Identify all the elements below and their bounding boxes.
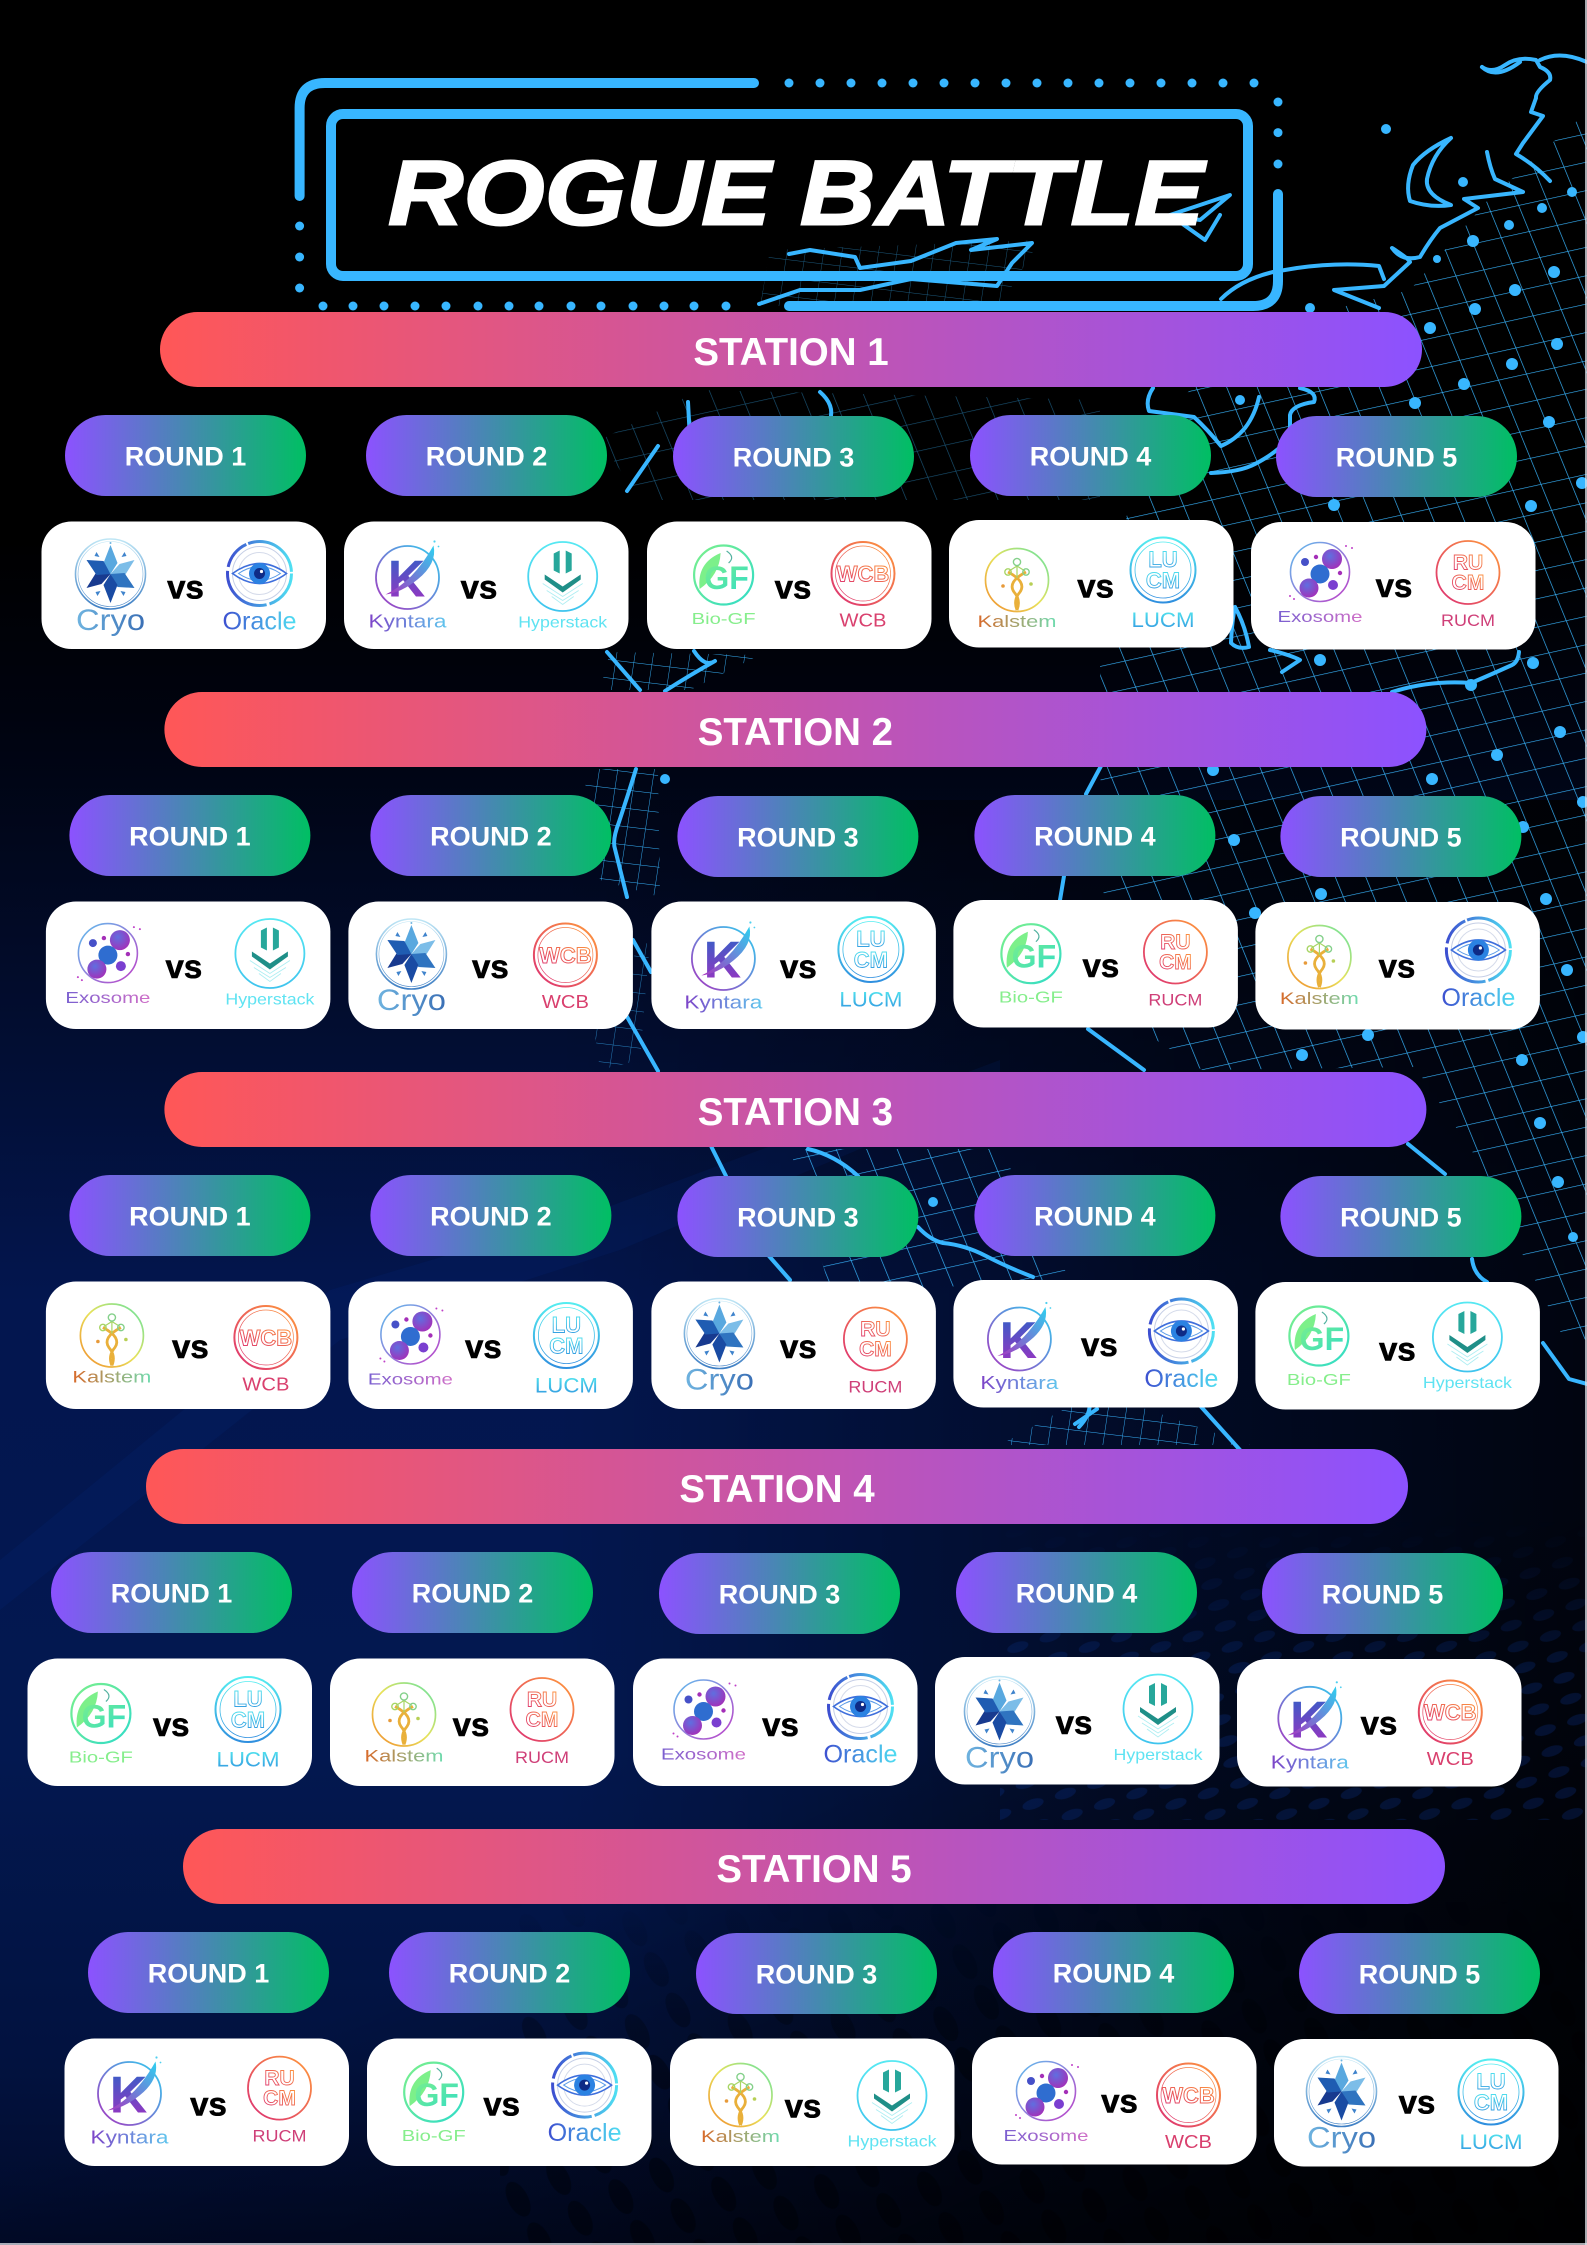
logo: Cryo: Cryo xyxy=(1307,2122,1376,2154)
match card: Bio-GF vs LUCM xyxy=(28,1658,312,1786)
round 3 pill xyxy=(696,1933,937,2014)
logo: WCB: WCB xyxy=(242,1374,289,1394)
logo: Hyperstack: Hyperstack xyxy=(225,992,316,1008)
round 5 pill xyxy=(1276,416,1517,497)
logo: Bio-GF: Bio-GF xyxy=(1287,1372,1351,1389)
logo: RUCM xyxy=(248,2057,311,2146)
round 5 pill: ROUND 5 xyxy=(1340,1202,1462,1232)
round 1 pill: ROUND 1 xyxy=(111,1578,232,1608)
station 2 xyxy=(46,692,1540,1030)
vs label: vs xyxy=(153,1706,190,1743)
match card: Cryo vs LUCM xyxy=(1274,2039,1558,2166)
logo: Oracle xyxy=(548,2053,622,2147)
logo: Kalstem xyxy=(364,1683,444,1766)
vs label: vs xyxy=(1399,2084,1435,2120)
logo: Kyntara: Kyntara xyxy=(368,612,448,632)
station 2 heading bar: STATION 2 xyxy=(698,711,893,754)
logo: WCB xyxy=(1419,1680,1482,1769)
station 3 heading bar xyxy=(164,1072,1426,1147)
match card: Bio-GF vs RUCM xyxy=(953,900,1238,1028)
vs label: vs xyxy=(1376,567,1412,604)
logo: Cryo: Cryo xyxy=(377,984,446,1017)
logo: WCB xyxy=(832,542,894,630)
station 1 heading bar: STATION 1 xyxy=(693,331,889,374)
round 3 pill xyxy=(659,1553,900,1634)
vs label: vs xyxy=(1361,1704,1397,1742)
logo: Cryo: Cryo xyxy=(965,1742,1034,1774)
logo: Kyntara xyxy=(368,540,448,632)
logo: Bio-GF xyxy=(1287,1306,1351,1389)
logo: Exosome: Exosome xyxy=(661,1746,746,1764)
logo: LUCM xyxy=(216,1677,280,1772)
round 4 pill xyxy=(974,1175,1215,1256)
logo: RUCM: RUCM xyxy=(515,1748,569,1767)
logo: Kalstem xyxy=(72,1304,151,1386)
round 5 pill: ROUND 5 xyxy=(1359,1960,1480,1990)
logo: LUCM: LUCM xyxy=(535,1374,598,1398)
station 4 heading bar xyxy=(146,1449,1408,1524)
logo: Bio-GF xyxy=(692,546,756,628)
round 5 pill: ROUND 5 xyxy=(1340,822,1462,852)
logo: RUCM xyxy=(1144,920,1207,1010)
logo: WCB: WCB xyxy=(542,992,589,1012)
round 4 pill xyxy=(993,1932,1234,2013)
logo: WCB: WCB xyxy=(1427,1749,1474,1769)
logo: Oracle: Oracle xyxy=(222,608,296,636)
logo: LUCM: LUCM xyxy=(216,1748,280,1772)
logo: Exosome xyxy=(1278,542,1363,626)
round 2 pill xyxy=(370,1175,611,1256)
logo: Exosome xyxy=(368,1305,453,1388)
logo: Bio-GF: Bio-GF xyxy=(402,2128,466,2145)
logo: Cryo xyxy=(76,539,146,637)
match card: Exosome vs RUCM xyxy=(1251,522,1536,650)
match card: Exosome vs Oracle xyxy=(633,1658,918,1786)
station 1 xyxy=(42,312,1536,650)
logo: WCB: WCB xyxy=(1165,2132,1212,2152)
logo: Bio-GF: Bio-GF xyxy=(692,611,756,628)
logo: LUCM: LUCM xyxy=(839,988,902,1012)
logo: Cryo: Cryo xyxy=(76,604,145,637)
vs label: vs xyxy=(1081,1326,1118,1363)
match card: Bio-GF vs Hyperstack xyxy=(1255,1282,1540,1410)
logo: Kalstem xyxy=(978,548,1056,631)
round 5 pill xyxy=(1262,1553,1503,1634)
logo: Oracle: Oracle xyxy=(824,1740,898,1768)
station 3 heading bar: STATION 3 xyxy=(698,1091,893,1134)
logo: Hyperstack xyxy=(1423,1302,1513,1392)
logo: Hyperstack: Hyperstack xyxy=(518,614,608,632)
logo: WCB xyxy=(234,1306,297,1394)
round 1 pill xyxy=(65,415,306,496)
logo: RUCM xyxy=(844,1308,907,1396)
vs label: vs xyxy=(453,1706,489,1743)
match card: Cryo vs Hyperstack xyxy=(935,1657,1220,1784)
logo: Exosome: Exosome xyxy=(1278,609,1363,626)
title text: ROGUE BATTLE xyxy=(388,142,1207,244)
logo: Oracle: Oracle xyxy=(548,2119,622,2147)
round 1 pill: ROUND 1 xyxy=(129,1202,251,1232)
match card: Cryo vs WCB xyxy=(348,902,633,1029)
vs label: vs xyxy=(461,568,497,606)
logo: Hyperstack xyxy=(225,919,316,1008)
logo: Oracle: Oracle xyxy=(1144,1365,1218,1393)
round 3 pill xyxy=(673,416,914,497)
vs label: vs xyxy=(172,1328,209,1365)
logo: Kalstem xyxy=(701,2064,780,2146)
vs label: vs xyxy=(780,1328,817,1365)
vs label: vs xyxy=(785,2088,821,2124)
match card: Bio-GF vs WCB xyxy=(647,522,932,649)
logo: Oracle xyxy=(222,542,296,636)
logo: Exosome xyxy=(661,1680,746,1764)
logo: Kalstem: Kalstem xyxy=(978,612,1056,631)
logo: LUCM xyxy=(1458,2060,1524,2154)
vs label: vs xyxy=(483,2086,520,2122)
match card: Kyntara vs Hyperstack xyxy=(344,522,628,649)
round 5 pill xyxy=(1299,1933,1540,2014)
logo: Kalstem: Kalstem xyxy=(364,1746,444,1766)
logo: Kyntara: Kyntara xyxy=(980,1373,1060,1393)
round 3 pill: ROUND 3 xyxy=(737,822,859,852)
logo: Cryo xyxy=(964,1676,1034,1774)
round 5 pill xyxy=(1280,1176,1521,1257)
match card: Kalstem vs WCB xyxy=(46,1282,330,1409)
logo: Kyntara: Kyntara xyxy=(684,992,764,1012)
match card: Kyntara vs LUCM xyxy=(651,902,936,1029)
round 4 pill xyxy=(970,415,1211,496)
round 5 pill: ROUND 5 xyxy=(1336,442,1457,472)
logo: WCB: WCB xyxy=(840,610,886,630)
station 2 heading bar xyxy=(164,692,1426,767)
logo: Oracle xyxy=(1441,918,1515,1012)
round 2 pill: ROUND 2 xyxy=(412,1578,533,1608)
logo: Cryo: Cryo xyxy=(685,1364,754,1396)
match card: Bio-GF vs Oracle xyxy=(367,2038,652,2166)
station 1 heading bar xyxy=(160,312,1422,387)
round 2 pill: ROUND 2 xyxy=(426,442,547,472)
logo: Hyperstack xyxy=(848,2061,938,2150)
match card: Exosome vs WCB xyxy=(972,2037,1256,2164)
logo: Cryo xyxy=(376,919,446,1017)
vs label: vs xyxy=(472,948,509,985)
logo: Oracle xyxy=(1144,1299,1218,1393)
round 1 pill xyxy=(51,1552,292,1633)
logo: Bio-GF xyxy=(999,924,1063,1007)
world map graphic xyxy=(583,55,1587,1450)
vs label: vs xyxy=(1101,2082,1138,2120)
round 2 pill: ROUND 2 xyxy=(430,822,552,852)
round 3 pill: ROUND 3 xyxy=(719,1580,840,1610)
vs label: vs xyxy=(166,948,202,985)
logo: Oracle: Oracle xyxy=(1441,984,1515,1012)
title frame and heading xyxy=(295,78,1283,310)
match card: Kalstem vs Hyperstack xyxy=(670,2038,954,2166)
vs label: vs xyxy=(190,2086,227,2122)
match card: Kalstem vs LUCM xyxy=(949,520,1234,648)
round 2 pill: ROUND 2 xyxy=(430,1202,552,1232)
logo: Kyntara xyxy=(980,1302,1060,1393)
round 2 pill xyxy=(370,795,611,876)
round 2 pill xyxy=(352,1552,593,1633)
logo: Kyntara: Kyntara xyxy=(1271,1752,1350,1772)
logo: Exosome: Exosome xyxy=(368,1372,453,1388)
vs label: vs xyxy=(775,568,811,606)
vs label: vs xyxy=(1083,947,1119,984)
logo: LUCM: LUCM xyxy=(1131,609,1195,632)
logo: RUCM: RUCM xyxy=(1148,990,1202,1010)
logo: RUCM: RUCM xyxy=(252,2127,307,2146)
logo: Bio-GF: Bio-GF xyxy=(999,990,1063,1007)
round 4 pill: ROUND 4 xyxy=(1030,442,1151,472)
vs label: vs xyxy=(1379,1330,1416,1368)
logo: RUCM xyxy=(510,1678,574,1767)
match card: Exosome vs Hyperstack xyxy=(46,902,330,1029)
logo: Kyntara xyxy=(684,921,764,1012)
logo: Bio-GF xyxy=(402,2063,466,2145)
round 5 pill: ROUND 5 xyxy=(1322,1580,1443,1610)
logo: Hyperstack: Hyperstack xyxy=(1114,1747,1204,1764)
logo: RUCM: RUCM xyxy=(1441,611,1495,630)
title frame outer dashed border xyxy=(295,78,1283,310)
title inner frame xyxy=(331,114,1248,276)
round 1 pill: ROUND 1 xyxy=(148,1958,269,1988)
station 5 heading bar xyxy=(183,1829,1445,1904)
logo: Kalstem xyxy=(1280,926,1359,1008)
round 4 pill: ROUND 4 xyxy=(1034,1202,1156,1232)
round 4 pill xyxy=(956,1552,1197,1633)
logo: Kalstem: Kalstem xyxy=(72,1368,151,1386)
round 2 pill: ROUND 2 xyxy=(449,1958,570,1988)
round 4 pill: ROUND 4 xyxy=(1034,822,1156,852)
logo: LUCM xyxy=(838,917,903,1012)
logo: Kalstem: Kalstem xyxy=(1280,989,1359,1008)
station 3 xyxy=(46,1072,1540,1410)
round 1 pill xyxy=(88,1932,329,2013)
station 5 heading bar: STATION 5 xyxy=(716,1848,912,1891)
logo: Kyntara xyxy=(1271,1681,1350,1772)
logo: Exosome: Exosome xyxy=(65,990,151,1007)
round 3 pill: ROUND 3 xyxy=(733,442,854,472)
round 1 pill: ROUND 1 xyxy=(125,442,246,472)
logo: LUCM xyxy=(534,1303,599,1398)
background xyxy=(0,636,1587,2245)
logo: Oracle xyxy=(824,1674,898,1768)
logo: Kyntara xyxy=(90,2056,170,2148)
vs label: vs xyxy=(1379,948,1415,984)
logo: Kyntara: Kyntara xyxy=(90,2128,170,2148)
round 2 pill xyxy=(389,1932,630,2013)
match card: Kyntara vs WCB xyxy=(1237,1659,1522,1786)
match card: Kyntara vs Oracle xyxy=(953,1280,1238,1408)
round 3 pill: ROUND 3 xyxy=(737,1202,859,1232)
round 3 pill xyxy=(677,796,918,877)
match card: Kyntara vs RUCM xyxy=(64,2038,349,2166)
station 4 xyxy=(28,1449,1522,1786)
logo: Hyperstack: Hyperstack xyxy=(1423,1375,1513,1392)
round 1 pill xyxy=(69,1175,310,1256)
match card: Kalstem vs RUCM xyxy=(330,1658,614,1786)
logo: Bio-GF xyxy=(69,1684,133,1766)
logo: Cryo xyxy=(1306,2056,1376,2154)
round 4 pill: ROUND 4 xyxy=(1016,1578,1137,1608)
vs label: vs xyxy=(780,948,817,985)
logo: LUCM xyxy=(1130,538,1196,632)
logo: WCB xyxy=(534,924,597,1012)
logo: Bio-GF: Bio-GF xyxy=(69,1750,133,1766)
vs label: vs xyxy=(762,1706,799,1743)
logo: WCB xyxy=(1157,2064,1220,2152)
round 3 pill: ROUND 3 xyxy=(756,1960,877,1990)
logo: LUCM: LUCM xyxy=(1459,2131,1523,2154)
match card: Exosome vs LUCM xyxy=(348,1282,633,1409)
logo: Exosome: Exosome xyxy=(1004,2128,1089,2145)
logo: Exosome xyxy=(65,924,151,1007)
station 5 xyxy=(64,1829,1558,2166)
round 5 pill xyxy=(1280,796,1521,877)
vs label: vs xyxy=(465,1328,502,1365)
vs label: vs xyxy=(167,568,204,606)
round 4 pill xyxy=(974,795,1215,876)
logo: Hyperstack xyxy=(1114,1674,1204,1764)
match card: Kalstem vs Oracle xyxy=(1255,902,1540,1030)
logo: Cryo xyxy=(684,1298,754,1396)
vs label: vs xyxy=(1077,568,1114,604)
logo: RUCM xyxy=(1436,541,1500,630)
vs label: vs xyxy=(1056,1704,1092,1741)
round 2 pill xyxy=(366,415,607,496)
match card: Cryo vs RUCM xyxy=(651,1282,936,1409)
round 4 pill: ROUND 4 xyxy=(1053,1958,1174,1988)
logo: Exosome xyxy=(1004,2062,1089,2145)
round 1 pill xyxy=(69,795,310,876)
round 3 pill xyxy=(677,1176,918,1257)
match card: Cryo vs Oracle xyxy=(42,522,326,649)
round 1 pill: ROUND 1 xyxy=(129,822,251,852)
logo: Kalstem: Kalstem xyxy=(701,2127,780,2146)
station 4 heading bar: STATION 4 xyxy=(679,1468,875,1511)
logo: RUCM: RUCM xyxy=(848,1378,902,1396)
logo: Hyperstack xyxy=(518,542,608,632)
logo: Hyperstack: Hyperstack xyxy=(848,2134,938,2150)
